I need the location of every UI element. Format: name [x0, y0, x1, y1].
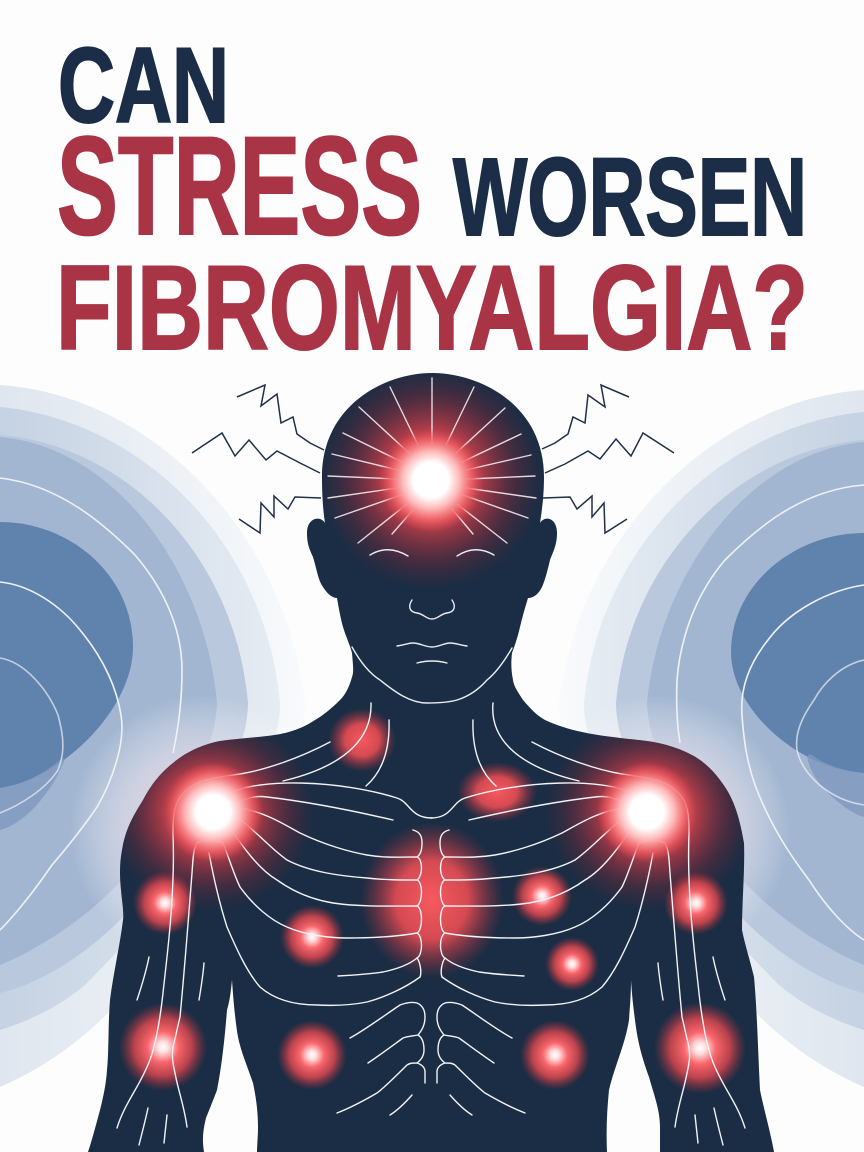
glow: left upper arm	[133, 871, 197, 935]
right wave contour lines	[677, 485, 864, 940]
glow: right upper arm	[664, 871, 728, 935]
glow core: right shoulder	[597, 762, 697, 862]
shoulder haze left	[70, 695, 340, 965]
glow: left forearm	[119, 1003, 207, 1091]
glow: right abdomen	[520, 1020, 590, 1090]
left wave contour lines	[0, 478, 182, 930]
face lines	[352, 550, 512, 703]
glow: chest	[360, 822, 504, 978]
glow: right shoulder	[550, 735, 744, 904]
glow: left abdomen	[277, 1020, 347, 1090]
glow: right forearm	[654, 1002, 746, 1094]
glow: upper chest	[457, 762, 537, 822]
human body silhouette	[88, 373, 774, 1152]
glow core: left shoulder	[163, 762, 263, 862]
glow: head	[325, 373, 537, 584]
bright glow cores over lines	[163, 428, 697, 862]
glow: left rib	[280, 905, 344, 969]
right concentric stress waves	[559, 390, 864, 1087]
glow: neck	[328, 708, 396, 772]
glow: right lower rib	[545, 937, 599, 991]
right body nerve lines	[431, 703, 745, 1145]
left body nerve lines	[117, 703, 432, 1145]
glow: left shoulder	[122, 736, 309, 904]
pain glow spots	[105, 366, 755, 1094]
title	[56, 25, 808, 375]
lightning bolts: stress signals	[192, 385, 674, 533]
left concentric stress waves	[0, 385, 305, 1087]
title: CAN	[58, 25, 229, 145]
head radiating rays	[328, 378, 536, 543]
glow core: head	[379, 428, 483, 532]
glow: right rib	[512, 866, 572, 926]
shoulder haze right	[520, 695, 790, 965]
title: STRESS	[57, 107, 422, 264]
